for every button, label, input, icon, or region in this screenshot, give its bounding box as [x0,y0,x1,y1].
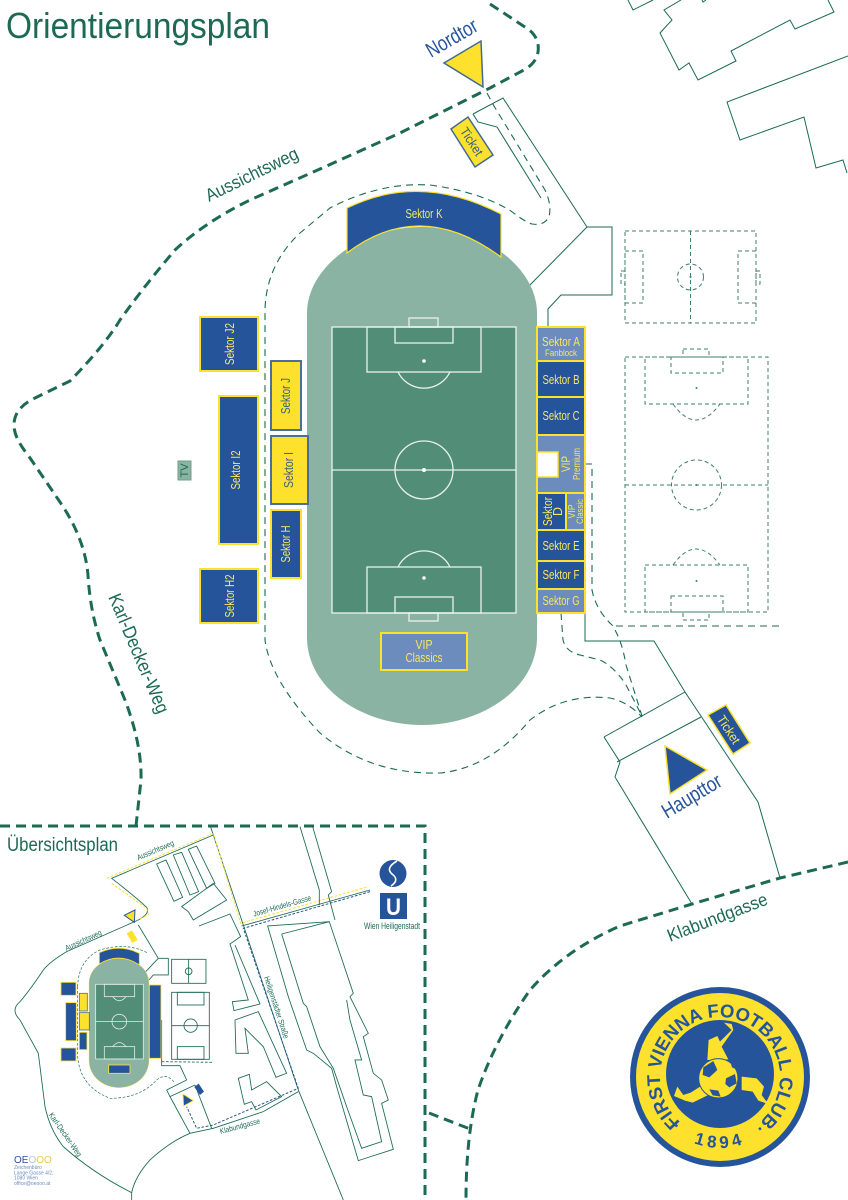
Sektor J2: Sektor J2 [223,323,237,365]
Sektor I: Sektor I [282,452,296,488]
Sektor A Fanblock: Sektor A [542,335,581,349]
Sektor H2: Sektor H2 [223,574,237,618]
Sektor I2 [219,396,258,544]
credit: Zeichenbüro: Zeichenbüro [14,1165,42,1171]
VIP Classics: Classics [406,651,442,665]
credit: Zeichenbüro: OEOOO [14,1155,52,1166]
Sektor B [537,361,585,397]
path: connector to Klabundgasse [429,1113,470,1129]
training pitch large [625,349,768,620]
Ticket main: Ticket [714,712,744,747]
icon: U-Bahn: U [386,894,401,921]
Sektor D [537,493,566,530]
overview map [15,825,393,1200]
Sektor C [537,397,585,435]
Sektor G [537,589,585,613]
Ticket north: Ticket [457,124,487,159]
TV tower: TV [179,463,191,478]
label: Klabundgasse: Klabundgasse [664,889,770,946]
VIP Classics [381,633,467,670]
Sektor D: Sektor [541,497,555,526]
Sektor I [271,436,308,504]
VIP Classics: VIP [416,638,432,652]
Sektor A Fanblock [537,327,585,361]
Sektor A Fanblock: Fanblock [545,348,577,358]
TV tower [178,461,191,480]
overview street labels: Aussichtsweg [136,839,175,862]
icon: S-Bahn [380,860,406,887]
Nordtor label: Nordtor [422,14,482,62]
VIP Classic: VIP [567,504,578,518]
heading: Übersichtsplan: Übersichtsplan [7,835,118,856]
Sektor E [537,530,585,561]
VIP Classic [566,493,586,530]
label: Wien Heiligenstadt: Wien Heiligenstadt [364,921,420,932]
overview track [89,958,149,1088]
Sektor G: Sektor G [542,594,580,608]
label: Aussichtsweg: Aussichtsweg [202,143,302,206]
title: Orientierungsplan [6,5,270,46]
training pitch small [621,231,760,323]
Sektor J: Sektor J [279,378,293,414]
Ticket north [451,117,493,167]
Ticket main [708,705,750,754]
overview buildings [138,827,393,1161]
Sektor J [271,361,301,430]
credit: Zeichenbüro: 1080 Wien [14,1176,38,1182]
overview street labels: Klabundgasse [219,1116,262,1136]
Sektor J2 [200,317,258,371]
credit: Zeichenbüro: office@oeooo.at [14,1181,51,1187]
label: Karl-Decker-Weg: Karl-Decker-Weg [103,591,173,717]
Sektor H [271,510,301,578]
path: Klabundgasse [466,862,848,1200]
north gate access paths [265,93,642,773]
overview street labels: Karl-Decker-Weg [47,1111,84,1158]
Sektor C: Sektor C [542,409,580,423]
VIP Classic: Classic [575,499,586,524]
club logo [630,987,810,1167]
Sektor K: Sektor K [406,207,443,221]
VIP Premium: Premium [572,448,583,480]
overview training pitches [162,959,213,1062]
main gate access paths [561,464,782,904]
path: Aussichtsweg and Karl-Decker-Weg [14,4,538,826]
overview route dashes [107,833,370,1128]
neighbouring buildings [628,0,848,173]
Sektor D: D [551,507,565,516]
panel: Übersichtsplan [0,825,426,1200]
club logo: FIRST VIENNA FOOTBALL CLUB [647,1004,792,1130]
VIP Premium: VIP [559,456,573,472]
Sektor I2: Sektor I2 [229,450,243,490]
Sektor K [347,191,501,257]
Haupttor label: Haupttor [658,770,726,823]
overview street labels: Aussichtsweg [64,928,103,953]
Sektor E: Sektor E [542,539,580,553]
Sektor F: Sektor F [542,568,580,582]
overview street labels [47,839,313,1158]
overview stands [61,910,204,1106]
stadium track [307,227,537,725]
icon: Nordtor triangle [444,41,483,87]
football pitch [332,318,516,621]
Sektor H2 [200,569,258,623]
overview street labels: Josef-Hindels-Gasse [252,893,313,919]
icon: U-Bahn [380,893,407,921]
frame [0,826,425,1200]
VIP Premium [537,435,585,493]
Sektor H: Sektor H [279,526,293,562]
Sektor B: Sektor B [542,373,580,387]
overview roads [15,825,370,1200]
icon: Haupttor triangle [665,746,707,794]
credit: Zeichenbüro: Lange Gasse 4/2, [14,1170,53,1176]
credit: Zeichenbüro [14,1155,53,1187]
club logo: · 1894 · [674,1124,762,1148]
overview street labels: Heiligenstädter Straße [262,975,291,1040]
Sektor F [537,561,585,589]
overview stadium paths [78,947,175,1098]
overview pitch [96,984,143,1059]
